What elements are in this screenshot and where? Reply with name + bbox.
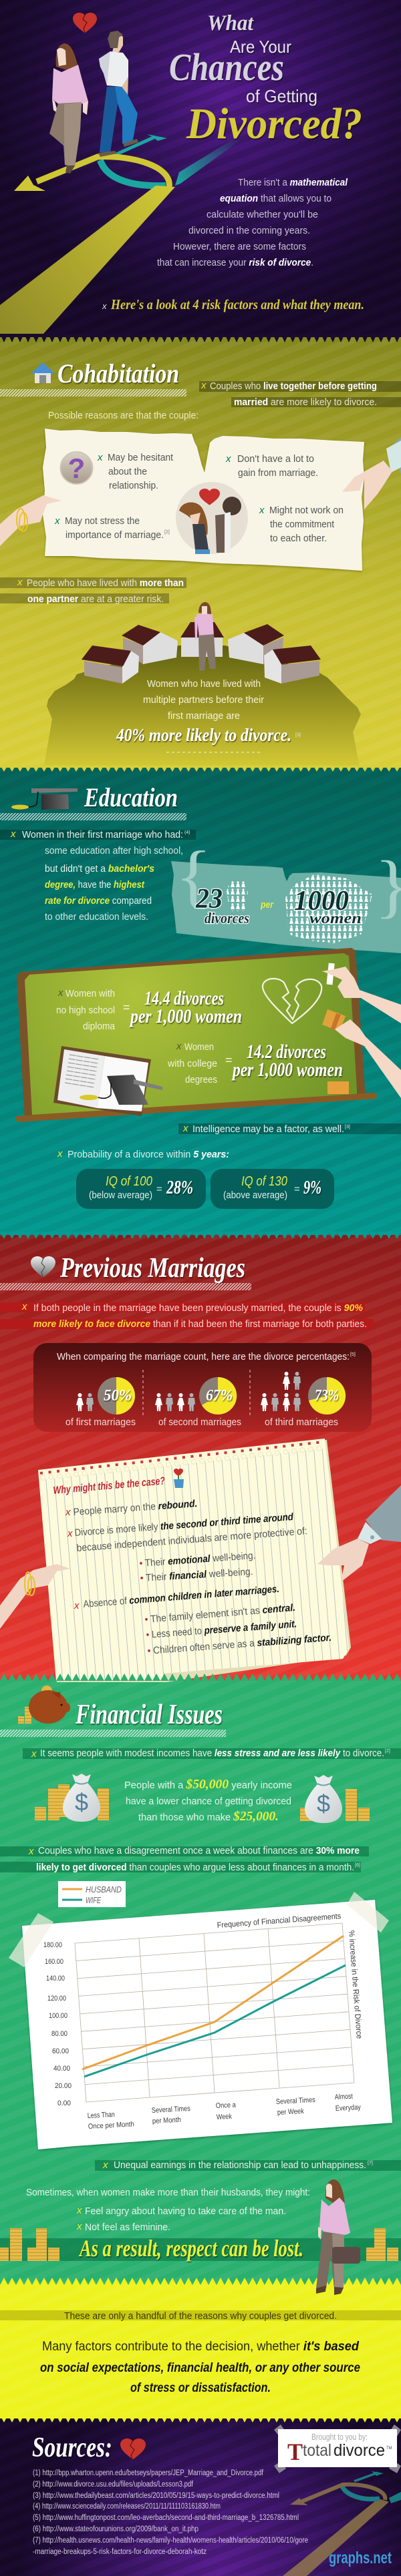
y axis labels: 120.00: [47, 1995, 66, 2003]
chalk drawing: broken heart: [263, 979, 321, 1023]
notepad text: • The family element isn't as central.: [144, 1602, 296, 1625]
y axis labels: 180.00: [43, 1941, 62, 1949]
callout: modest incomes: x: [31, 1748, 37, 1760]
sponsor card: total divorce: total: [303, 2441, 331, 2460]
text: many factors: Many factors contribute to the decision, whether it's based: [42, 2340, 359, 2354]
text: many factors: of stress or dissatisfaction.: [130, 2381, 271, 2395]
callout: respect can be lost: As a result, respect can be lost.: [79, 2235, 303, 2262]
text: first marriage education: some education after high school,: [45, 845, 183, 856]
notepad text: • Their emotional well-being.: [139, 1550, 256, 1569]
reason: hesitant: [97, 452, 174, 491]
reason: commitment: Might not work on: [269, 505, 344, 516]
illustration: faded road: [283, 2471, 401, 2576]
source list: (1) http://bpp.wharton.upenn.edu/betseys/papers/JEP_Marriage_and_Divorce.pdf: [33, 2469, 264, 2477]
callout: weekly disagreements: [6]: [355, 1863, 360, 1868]
reason: importance of marriage: [2]: [164, 530, 170, 535]
stat: third marriages: [261, 1372, 346, 1428]
text: many factors: [40, 2340, 360, 2395]
stat: first marriages: [65, 1377, 136, 1428]
torn strip: 23 divorces per 1000 women: 23: [195, 884, 223, 915]
callout: ninety percent: more likely to face divorce than if it had been the first marriage for both parties.: [33, 1318, 367, 1330]
section background: hero: [0, 0, 401, 337]
sponsor card: total divorce: T: [287, 2438, 303, 2465]
text: yearly income comparison: People with a $50,000 yearly income: [124, 1777, 292, 1792]
torn strip: 23 divorces per 1000 women: per: [260, 899, 274, 911]
panel: cohabitation: [0, 358, 401, 766]
chalk text: college degrees: 14.2 divorces: [247, 1041, 326, 1063]
heading: Sources:: [32, 2432, 112, 2463]
stat box: IQ of 100: IQ of 100: [106, 1174, 152, 1189]
reason: commitment: [259, 505, 344, 544]
title: Chances: [169, 45, 284, 89]
chalk text: no high school diploma: per 1,000 women: [129, 1005, 242, 1027]
stat: forty percent more likely: [3]: [295, 733, 301, 738]
icon: money bag right with coins: [300, 1775, 370, 1823]
source list: (6) http://www.stateofourunions.org/2009/bank_on_it.php: [33, 2525, 198, 2533]
x axis labels: Everyday: [336, 2103, 362, 2113]
torn strip: 23 divorces per 1000 women: 1000: [294, 886, 349, 917]
title: Are Your: [230, 37, 291, 57]
text: first marriage education: x: [10, 828, 16, 840]
lead-in line: Here's a look at 4 risk factors and what they mean.: [110, 296, 364, 312]
callout: ninety percent: If both people in the marriage have been previously married, the couple is 90%: [33, 1302, 363, 1314]
intro paragraph: divorced in the coming years.: [188, 225, 310, 236]
stat box: IQ of 100: [76, 1169, 206, 1209]
section background: cohabitation: [0, 337, 401, 768]
chart legend: WIFE: [86, 1895, 101, 1905]
icon: gray broken heart: [31, 1256, 55, 1277]
stat: forty percent more likely: Women who have lived with: [147, 678, 261, 690]
icon: eraser and hand: [322, 1009, 401, 1098]
text: first marriage education: Women in their first marriage who had:: [22, 829, 183, 840]
callout: living together: x: [200, 380, 207, 391]
text: first marriage education: rate for divorce compared: [45, 895, 152, 907]
text: handful of reasons: These are only a handful of the reasons why couples get divorced.: [64, 2310, 337, 2322]
stat: forty percent more likely: first marriage are: [168, 710, 240, 722]
source list: (5) http://www.huffingtonpost.com/leo-averbach/second-and-third-marriage_b_1326785.html: [33, 2514, 299, 2522]
callout: more than one partner: [0, 577, 186, 605]
notepad text: because independent individuals are more protective of:: [76, 1525, 307, 1554]
notepad text: • Less need to preserve a family unit.: [146, 1618, 297, 1641]
intro paragraph: calculate whether you'll be: [207, 209, 318, 220]
notepad: why might this be the case: [38, 1439, 351, 1682]
reason: nothing to gain: gain from marriage.: [238, 467, 318, 479]
text: when women earn more: x: [76, 2205, 82, 2216]
stat box: IQ of 100: 28%: [166, 1177, 193, 1198]
x axis labels: Several Times: [152, 2105, 190, 2115]
x axis labels: Less Than: [88, 2111, 115, 2120]
stat box: IQ of 130: =: [294, 1184, 300, 1195]
text: yearly income comparison: have a lower chance of getting divorced: [126, 1796, 291, 1807]
source list: -marriage-breakups-5-risk-factors-for-divorce-deborah-kotz: [33, 2548, 207, 2556]
lead-in line: x: [102, 301, 107, 311]
callout: weekly disagreements: x: [28, 1846, 34, 1857]
reason: importance of marriage: importance of marriage.: [65, 529, 164, 541]
illustration: broken heart: [73, 13, 97, 33]
chart panel: divorce percentages: When comparing the marriage count, here are the divorce percentages:: [57, 1351, 350, 1362]
chalk text: college degrees: degrees: [185, 1074, 217, 1085]
callout: modest incomes: [2]: [385, 1749, 390, 1754]
text: when women earn more: [26, 2187, 310, 2233]
icon: money bag right with coins: $: [317, 1790, 330, 1817]
title: What: [207, 11, 254, 35]
intro paragraph: There isn't a mathematical: [238, 177, 348, 188]
section background: conclusion: [0, 2285, 401, 2418]
illustration: sad couple: [176, 482, 248, 554]
notepad text: Why might this be the case?: [53, 1475, 166, 1497]
reason: nothing to gain: Don't have a lot to: [237, 453, 314, 465]
chart panel: divorce percentages: [5]: [350, 1352, 356, 1357]
stat: third marriages: of third marriages: [265, 1416, 338, 1428]
notepad text: [53, 1475, 332, 1657]
x axis labels: Week: [217, 2113, 233, 2121]
chart legend: HUSBAND: [86, 1884, 122, 1894]
sponsor card: total divorce: divorce: [333, 2441, 385, 2460]
icon: broken heart: [120, 2438, 146, 2459]
text: when women earn more: x: [76, 2221, 82, 2232]
chalk text: no high school diploma: diploma: [83, 1021, 116, 1032]
icon: chalk and hand: [322, 963, 401, 1023]
reason: nothing to gain: x: [225, 453, 231, 465]
chalkboard: [16, 948, 401, 1122]
icon: money bag left with coins: [35, 1774, 109, 1822]
illustration: man walking away: [98, 31, 138, 157]
chart title: Frequency of Financial Disagreements: [217, 1911, 342, 1930]
y axis labels: 0.00: [57, 2099, 71, 2107]
text: when women earn more: Not feel as feminine.: [85, 2222, 170, 2233]
text: first marriage education: but didn't get a bachelor's: [45, 863, 154, 874]
stat: second marriages: of second marriages: [158, 1416, 241, 1428]
x axis labels: Several Times: [276, 2096, 315, 2106]
source list: (4) http://www.sciencedaily.com/releases/2011/11/111103161830.htm: [33, 2503, 221, 2511]
x axis labels: Once a: [216, 2101, 237, 2110]
notepad text: x: [74, 1600, 80, 1611]
intro paragraph: that can increase your risk of divorce.: [157, 257, 313, 268]
x axis labels: per Week: [277, 2107, 305, 2117]
heading: Education: [84, 782, 178, 812]
text: yearly income comparison: [124, 1777, 292, 1824]
torn strip: 23 divorces per 1000 women: women: [309, 910, 362, 927]
callout: unequal earnings: Unequal earnings in the relationship can lead to unhappiness.: [114, 2159, 366, 2171]
reason: importance of marriage: x: [54, 515, 60, 527]
notepad text: Absence of common children in later marriages.: [83, 1583, 279, 1610]
panel: conclusion: [0, 2179, 401, 2395]
notepad text: • Their financial well-being.: [140, 1566, 253, 1584]
illustration: open book with cap: [53, 1046, 162, 1116]
callout: modest incomes: It seems people with modest incomes have less stress and are less likely to divorce.: [40, 1748, 384, 1759]
intro paragraph: [157, 177, 348, 268]
panel: education: [0, 782, 401, 1209]
icon: question mark: [60, 452, 92, 484]
callout: intelligence: [3]: [345, 1125, 350, 1129]
heading: Previous Marriages: [59, 1253, 245, 1284]
y axis labels: 20.00: [55, 2082, 72, 2090]
text: when women earn more: Feel angry about having to take care of the man.: [85, 2206, 286, 2217]
callout: intelligence: x: [182, 1123, 188, 1134]
panel: financial issues: [0, 1686, 401, 2262]
stat: forty percent more likely: 40% more likely to divorce.: [116, 725, 291, 745]
decorative coins right: [366, 2228, 398, 2261]
source list: (7) http://health.usnews.com/health-news/family-health/womens-health/articles/2010/06/10/gore: [33, 2537, 308, 2545]
y axis labels: 80.00: [51, 2030, 68, 2038]
title: [169, 11, 362, 148]
callout: intelligence: [178, 1123, 401, 1135]
chalk text: no high school diploma: =: [123, 1001, 130, 1014]
sponsor card: total divorce: TM: [386, 2446, 392, 2451]
text: yearly income comparison: than those who make $25,000.: [138, 1809, 279, 1824]
section background: previous marriages: [0, 1235, 401, 1681]
illustration: left hand holding paper: [0, 495, 61, 546]
text: probability within 5 years: x: [57, 1148, 63, 1160]
icon: graduation cap: [11, 788, 78, 810]
illustration: right hand holding notepad: [317, 1485, 401, 1582]
chalk text: no high school diploma: no high school: [56, 1005, 115, 1016]
line chart on taped paper: [9, 1892, 392, 2149]
icon: house: [31, 362, 55, 383]
notepad text: Divorce is more likely the second or third time around: [74, 1511, 294, 1539]
chalk text: no high school diploma: [56, 987, 242, 1032]
text: probability within 5 years: Probability of a divorce within 5 years:: [68, 1149, 229, 1160]
chalk text: college degrees: with college: [167, 1058, 217, 1069]
callout: weekly disagreements: [0, 1845, 369, 1873]
text: many factors: on social expectations, financial health, or any other source: [40, 2361, 360, 2375]
y axis labels: 160.00: [45, 1958, 63, 1966]
panel: hero: [0, 11, 364, 334]
callout: unequal earnings: [7]: [368, 2161, 373, 2165]
section background: financial issues: [0, 1681, 401, 2285]
text: first marriage education: [0, 828, 196, 923]
source list: (2) http://www.divorce.usu.edu/files/uploads/Lesson3.pdf: [33, 2481, 194, 2489]
reason: commitment: to each other.: [270, 533, 327, 544]
notepad text: x: [65, 1507, 71, 1518]
y axis labels: 140.00: [46, 1975, 65, 1983]
x axis labels: Almost: [335, 2093, 353, 2101]
icon: question mark: ?: [68, 453, 85, 484]
callout: unequal earnings: x: [102, 2159, 108, 2171]
chalk text: college degrees: Women: [184, 1041, 214, 1053]
callout: weekly disagreements: likely to get divorced than couples who argue less about finances in a month.: [36, 1862, 354, 1873]
illustration: forked road: [0, 134, 241, 334]
callout: more than one partner: one partner are at a greater risk.: [27, 593, 164, 605]
callout: more than one partner: People who have lived with more than: [27, 577, 184, 589]
stat: third marriages: 73%: [315, 1387, 339, 1404]
chalk text: college degrees: [167, 1041, 343, 1085]
title: of Getting: [246, 86, 317, 106]
chalk text: no high school diploma: Women with: [65, 988, 115, 999]
section background: sources: [0, 2418, 401, 2576]
panel: previous marriages: [0, 1253, 401, 1682]
stat box: IQ of 100: (below average): [89, 1190, 152, 1201]
reason: hesitant: relationship.: [109, 480, 158, 491]
sponsor card: total divorce: [274, 2424, 401, 2473]
reason: commitment: the commitment: [270, 519, 335, 530]
text: first marriage education: (4): [184, 830, 190, 835]
section background: education: [0, 768, 401, 1235]
sponsor card: total divorce: Brought to you by:: [311, 2432, 368, 2442]
illustration: businesswoman with briefcase: [316, 2179, 360, 2295]
reason: hesitant: x: [97, 452, 103, 463]
chalk text: college degrees: per 1,000 women: [231, 1059, 343, 1081]
y axis labels: 40.00: [53, 2065, 70, 2073]
torn strip: 23 divorces per 1000 women: [171, 837, 401, 953]
torn paper with reasons: [43, 429, 364, 571]
stat: second marriages: [155, 1377, 241, 1428]
title: Divorced?: [186, 99, 362, 148]
stat box: IQ of 130: (above average): [223, 1190, 287, 1201]
torn strip: 23 divorces per 1000 women: divorces: [205, 910, 249, 927]
stat: forty percent more likely: [116, 678, 301, 745]
chart panel: divorce percentages: [33, 1343, 372, 1432]
reason: nothing to gain: [225, 453, 318, 479]
reason: importance of marriage: May not stress the: [65, 515, 140, 527]
text: possible reasons: Possible reasons are that the couple:: [48, 410, 198, 421]
intro paragraph: However, there are some factors: [173, 241, 306, 252]
source list: [33, 2469, 308, 2556]
illustration: woman among houses: [194, 602, 216, 671]
callout: living together: [199, 380, 401, 408]
callout: living together: married are more likely to divorce.: [234, 397, 377, 408]
y axis labels: 60.00: [52, 2047, 69, 2055]
stat: first marriages: of first marriages: [65, 1416, 136, 1428]
heading: Cohabitation: [57, 358, 179, 389]
heading: Financial Issues: [75, 1700, 223, 1730]
intro paragraph: equation that allows you to: [220, 193, 331, 204]
reason: importance of marriage: [54, 515, 170, 541]
chart legend: [58, 1881, 126, 1907]
illustration: woman walking away: [49, 43, 88, 174]
reason: commitment: x: [259, 505, 265, 516]
x axis labels: per Month: [152, 2116, 181, 2125]
stat box: IQ of 100: =: [156, 1184, 162, 1195]
notepad text: • Children often serve as a stabilizing factor.: [147, 1632, 332, 1657]
chalk text: college degrees: x: [176, 1041, 182, 1052]
illustration: left hand holding notepad: [0, 1564, 70, 1629]
chalk text: no high school diploma: 14.4 divorces: [144, 987, 224, 1009]
icon: money bag left with coins: $: [75, 1788, 88, 1816]
y axis labels: 100.00: [49, 2012, 68, 2020]
illustration: hill with multiple houses: [44, 622, 361, 766]
torn strip: 23 divorces per 1000 women: {: [175, 837, 212, 915]
panel: sources: [32, 2424, 401, 2576]
x axis labels: Once per Month: [88, 2120, 134, 2131]
y axis title: % increase in the Risk of Divorce: [347, 1930, 364, 2039]
chalk text: no high school diploma: x: [57, 987, 63, 999]
chalk text: college degrees: =: [225, 1053, 233, 1067]
reason: hesitant: May be hesitant: [108, 452, 174, 463]
callout: more than one partner: x: [17, 577, 23, 588]
text: when women earn more: Sometimes, when women make more than their husbands, they might:: [26, 2187, 310, 2198]
x axis labels: [88, 2093, 362, 2131]
callout: weekly disagreements: Couples who have a disagreement once a week about finances are 30% more: [38, 1845, 360, 1856]
icon: piggy bank with coins: [18, 1686, 70, 1724]
stat box: IQ of 130: [211, 1169, 334, 1209]
icon: heart flower pot: [174, 1469, 184, 1488]
stat box: IQ of 130: IQ of 130: [241, 1174, 287, 1189]
notepad text: People marry on the rebound.: [73, 1498, 198, 1518]
callout: ninety percent: x: [21, 1301, 27, 1312]
callout: living together: Couples who live together before getting: [210, 380, 377, 392]
y axis labels: [43, 1941, 72, 2107]
text: first marriage education: to other education levels.: [45, 911, 148, 923]
text: first marriage education: degree, have the highest: [45, 879, 145, 890]
stat: forty percent more likely: multiple partners before their: [143, 694, 264, 706]
decorative coins left: [0, 2228, 59, 2261]
callout: ninety percent: [0, 1301, 374, 1330]
source list: (3) http://www.thedailybeast.com/articles/2010/05/19/15-ways-to-predict-divorce.html: [33, 2492, 279, 2500]
stat: first marriages: 50%: [104, 1387, 132, 1404]
illustration: right hand holding paper: [342, 437, 401, 509]
stat box: IQ of 130: 9%: [303, 1177, 321, 1198]
reason: hesitant: about the: [108, 466, 147, 477]
callout: intelligence: Intelligence may be a factor, as well.: [192, 1123, 344, 1135]
notepad text: x: [67, 1528, 73, 1539]
stat: second marriages: 67%: [206, 1387, 233, 1404]
